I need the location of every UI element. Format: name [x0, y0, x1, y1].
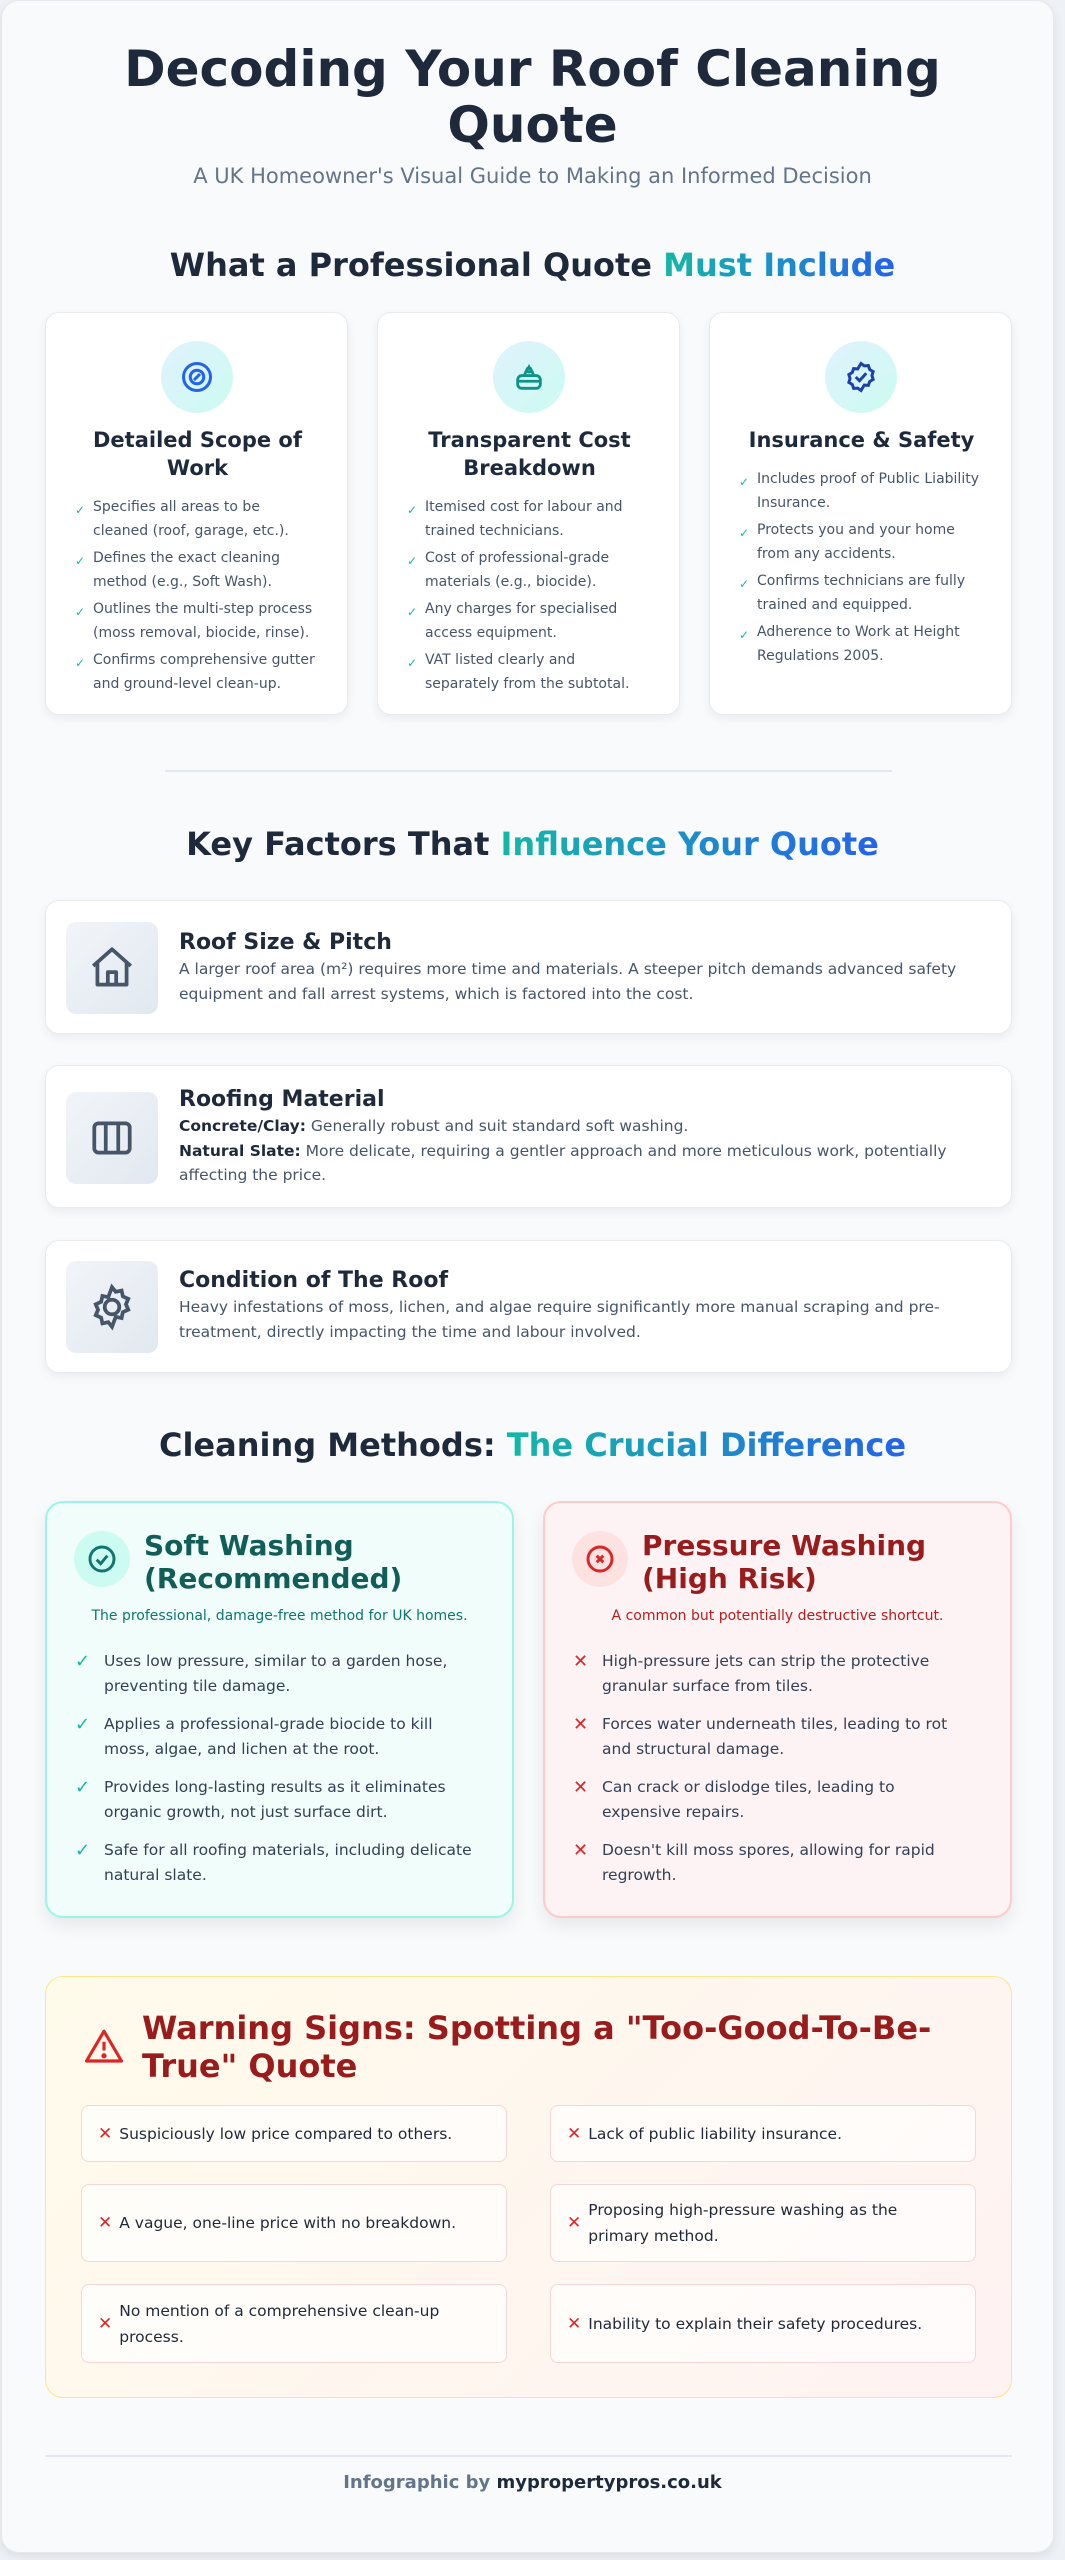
list: Defines the exact cleaning method (e.g., Soft Wash). [93, 550, 280, 590]
list: ✕ [573, 1777, 588, 1798]
list: ✕ [573, 1840, 588, 1861]
card title [93, 428, 302, 480]
list: Includes proof of Public Liability Insurance. [757, 471, 979, 511]
item: Inability to explain their safety procedures. [588, 2314, 922, 2332]
panel: condition [45, 1240, 1012, 1373]
footer: Infographic by mypropertypros.co.uk [343, 2472, 722, 2493]
list: Provides long-lasting results as it eliminates organic growth, not just surface dirt. [104, 1778, 446, 1821]
list: ✓ [75, 1840, 90, 1861]
text: A larger roof area (m²) requires more time and materials. A steeper pitch demands advanced safety equipment and fall arrest systems, which is factored into the cost. [179, 960, 956, 1002]
list [573, 1651, 947, 1884]
icon: money bag [493, 341, 565, 413]
item [550, 2184, 976, 2262]
panel: pressure washing [543, 1501, 1012, 1918]
title [124, 40, 941, 154]
list [740, 471, 979, 664]
panel: insurance [709, 312, 1012, 715]
method title: Soft Washing [144, 1529, 354, 1562]
icon: target [161, 341, 233, 413]
item: Suspiciously low price compared to others. [119, 2124, 452, 2142]
method title [144, 1529, 402, 1595]
list: Protects you and your home from any accidents. [757, 522, 955, 562]
item: ✕ [98, 2213, 112, 2233]
item: ✕ [98, 2124, 112, 2144]
item: ✕ [567, 2124, 581, 2144]
method title: Pressure Washing [642, 1529, 926, 1562]
list: Itemised cost for labour and trained technicians. [425, 499, 623, 539]
list: ✕ [573, 1714, 588, 1735]
icon: warning triangle [84, 2030, 124, 2063]
list: High-pressure jets can strip the protective granular surface from tiles. [602, 1652, 929, 1695]
panel: warning signs [45, 1976, 1012, 2398]
heading: must include: What a Professional Quote Must Include [170, 246, 895, 284]
list: Specifies all areas to be cleaned (roof, garage, etc.). [93, 499, 289, 539]
text [179, 1087, 947, 1184]
list: Confirms comprehensive gutter and ground-level clean-up. [93, 652, 315, 692]
list [75, 1651, 472, 1884]
list: Cost of professional-grade materials (e.g., biocide). [425, 550, 609, 590]
title: Quote [447, 96, 618, 154]
icon: house [66, 922, 158, 1014]
list: Applies a professional-grade biocide to kill moss, algae, and lichen at the root. [104, 1715, 433, 1758]
item: ✕ [98, 2314, 112, 2334]
method subtitle: The professional, damage-free method for UK homes. [91, 1608, 468, 1624]
icon: check circle [74, 1531, 130, 1587]
list: VAT listed clearly and separately from the subtotal. [425, 652, 629, 692]
list: Doesn't kill moss spores, allowing for rapid regrowth. [602, 1841, 935, 1884]
list: Forces water underneath tiles, leading to rot and structural damage. [602, 1715, 947, 1758]
method title: (Recommended) [144, 1562, 402, 1595]
list: Uses low pressure, similar to a garden hose, preventing tile damage. [104, 1652, 447, 1695]
icon: badge check [825, 341, 897, 413]
card title: Insurance & Safety [749, 428, 974, 452]
list [76, 499, 315, 692]
item [81, 2284, 507, 2363]
method title [642, 1529, 926, 1595]
icon: gear [66, 1261, 158, 1353]
text: Condition of The Roof [179, 1268, 448, 1293]
item: ✕ [567, 2213, 581, 2233]
subtitle: A UK Homeowner's Visual Guide to Making an Informed Decision [193, 164, 872, 188]
panel: scope of work [45, 312, 348, 715]
list: ✓ [75, 1777, 90, 1798]
list: Adherence to Work at Height Regulations 2005. [757, 624, 960, 664]
list: ✓ [75, 1714, 90, 1735]
card title: Work [167, 456, 228, 480]
text: Natural Slate: More delicate, requiring a gentler approach and more meticulous work, potentially affecting the price. [179, 1142, 947, 1184]
icon: columns [66, 1092, 158, 1184]
item [550, 2284, 976, 2363]
method title: (High Risk) [642, 1562, 817, 1595]
text [179, 1268, 940, 1340]
text: Heavy infestations of moss, lichen, and algae require significantly more manual scraping and pre-treatment, directly impacting the time and labour involved. [179, 1298, 940, 1340]
item: A vague, one-line price with no breakdown. [119, 2214, 456, 2232]
panel: cost breakdown [377, 312, 680, 715]
heading: cleaning methods: Cleaning Methods: The Crucial Difference [159, 1426, 906, 1464]
warning title: Warning Signs: Spotting a "Too-Good-To-Be-True" Quote [142, 2009, 931, 2085]
item: No mention of a comprehensive clean-up process. [119, 2302, 439, 2346]
icon: x circle [572, 1531, 628, 1587]
item [81, 2184, 507, 2262]
list: Any charges for specialised access equipment. [425, 601, 617, 641]
list [408, 499, 629, 692]
list: ✓ [75, 1651, 90, 1672]
card title: Breakdown [463, 456, 596, 480]
heading: key factors: Key Factors That Influence Your Quote [186, 825, 879, 863]
item: Lack of public liability insurance. [588, 2124, 842, 2142]
item [81, 2105, 507, 2162]
list: ✕ [573, 1651, 588, 1672]
text [179, 930, 956, 1002]
item [550, 2105, 976, 2162]
text: Concrete/Clay: Generally robust and suit standard soft washing. [179, 1117, 688, 1135]
card title [428, 428, 631, 480]
panel: material [45, 1065, 1012, 1208]
list: Outlines the multi-step process (moss removal, biocide, rinse). [93, 601, 312, 641]
list: Safe for all roofing materials, including delicate natural slate. [104, 1841, 472, 1884]
item: ✕ [567, 2314, 581, 2334]
text: Roofing Material [179, 1087, 384, 1112]
card title: Detailed Scope of [93, 428, 302, 452]
text: Roof Size & Pitch [179, 930, 392, 955]
list: Can crack or dislodge tiles, leading to expensive repairs. [602, 1778, 895, 1821]
method subtitle: A common but potentially destructive shortcut. [612, 1608, 943, 1624]
list: Confirms technicians are fully trained and equipped. [757, 573, 965, 613]
item: Proposing high-pressure washing as the primary method. [588, 2201, 897, 2245]
panel: soft washing [45, 1501, 514, 1918]
panel: roof size [45, 900, 1012, 1034]
title: Decoding Your Roof Cleaning [124, 40, 941, 98]
card title: Transparent Cost [428, 428, 631, 452]
